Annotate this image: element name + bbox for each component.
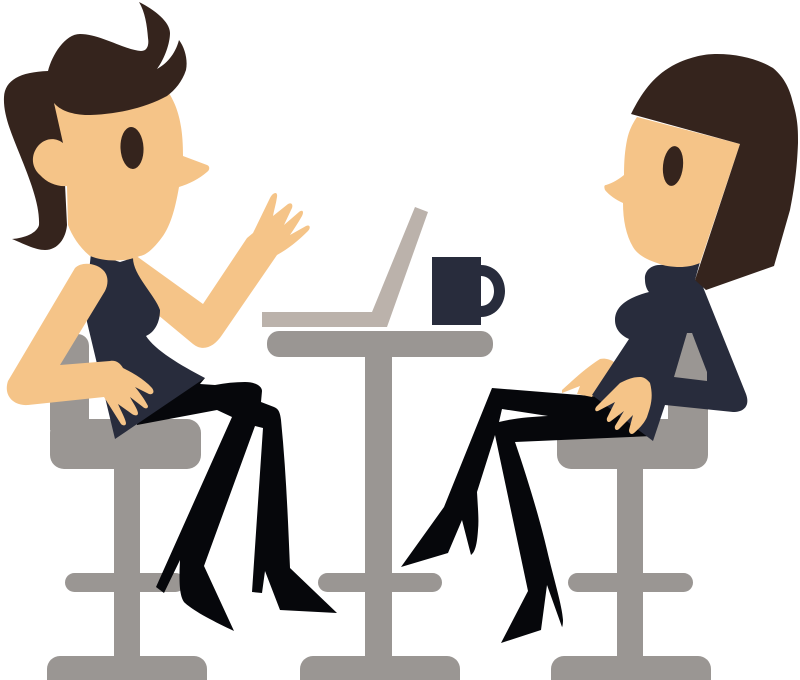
left woman ear bbox=[33, 139, 75, 186]
left woman bbox=[4, 2, 337, 631]
left stool bbox=[47, 334, 207, 680]
right woman hair bbox=[631, 54, 798, 290]
left woman ponytail and fringe bbox=[4, 2, 187, 250]
left woman eye bbox=[119, 126, 145, 170]
right woman legs and heels bbox=[401, 388, 653, 643]
right woman front hand bbox=[595, 377, 652, 434]
right woman face bbox=[604, 117, 740, 267]
right woman eye bbox=[661, 145, 685, 187]
left woman raised arm and hand bbox=[125, 193, 310, 348]
left woman legs and heels bbox=[135, 378, 337, 631]
right woman turtleneck top bbox=[592, 262, 747, 441]
right woman back hand bbox=[562, 359, 614, 397]
right stool bbox=[551, 333, 711, 680]
left woman sleeveless top bbox=[86, 253, 205, 439]
coffee mug bbox=[432, 257, 505, 325]
left woman resting arm and hand bbox=[7, 264, 153, 425]
left woman face bbox=[54, 90, 209, 260]
table bbox=[267, 331, 493, 680]
laptop bbox=[262, 207, 428, 327]
right woman bbox=[401, 54, 798, 643]
